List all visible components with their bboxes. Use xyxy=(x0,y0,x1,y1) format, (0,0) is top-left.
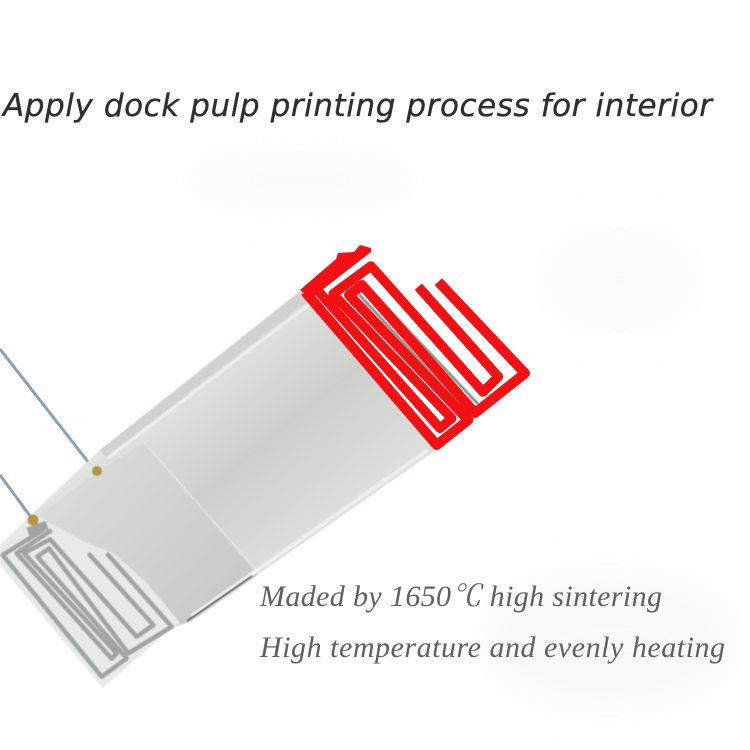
heating element product photo xyxy=(0,245,525,688)
red highlighted heating trace xyxy=(300,245,525,445)
title: Apply dock pulp printing process for interior xyxy=(1,88,714,124)
connector: lower xyxy=(28,514,38,526)
printed grey heating trace xyxy=(3,525,172,677)
ceramic sheet xyxy=(0,288,436,688)
feature text: sintering: Maded by 1650℃ high sintering xyxy=(259,580,662,613)
wire: lower lead xyxy=(0,475,30,516)
wire: upper lead xyxy=(0,349,92,467)
background haze xyxy=(170,150,740,710)
connector: upper xyxy=(92,466,102,476)
feature text: heating: High temperature and evenly heating xyxy=(259,631,725,664)
